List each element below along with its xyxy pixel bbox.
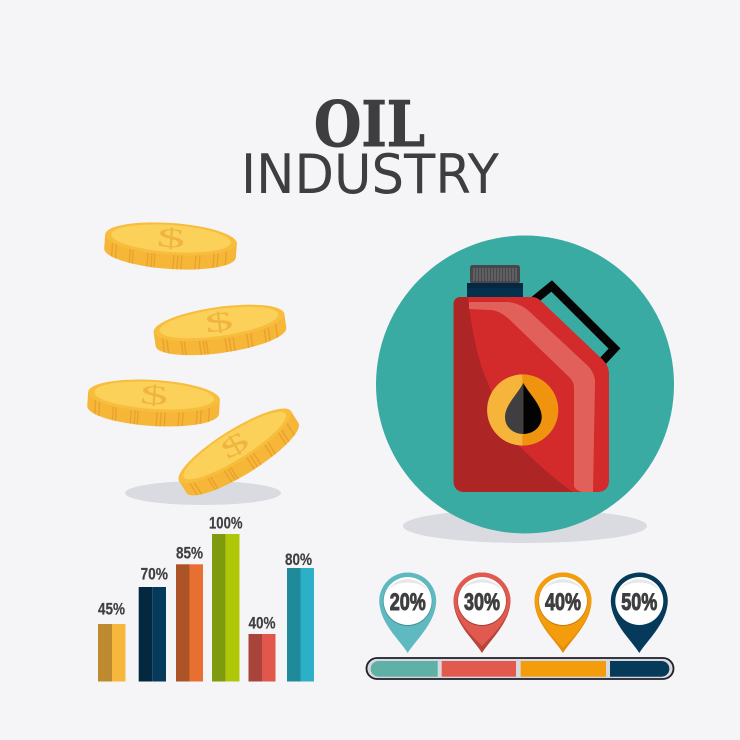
- icon: oil drop: [505, 383, 542, 434]
- pin 50%: [611, 572, 668, 653]
- coin 3: [87, 380, 220, 426]
- segment orange: [521, 661, 606, 677]
- pin 50%: 50%: [621, 589, 657, 616]
- bar 70%: 70%: [140, 566, 168, 584]
- bar 100%: 100%: [209, 514, 243, 532]
- bar 70%: [139, 566, 168, 682]
- title: [241, 87, 500, 206]
- infographic canvas: [87, 99, 674, 682]
- coin 1: [104, 222, 237, 270]
- jug cap: [470, 265, 520, 284]
- coin 4: $: [214, 425, 254, 465]
- pin 40%: [534, 572, 592, 653]
- bar 40%: [248, 614, 276, 682]
- bar 100%: [209, 514, 243, 682]
- coin 2: [154, 304, 286, 356]
- bar 45%: 45%: [98, 600, 125, 618]
- jug highlight band: [469, 302, 595, 492]
- pin 20%: [379, 572, 436, 653]
- coin 1: $: [156, 222, 186, 254]
- teal circle: [376, 236, 674, 534]
- pin 20%: 20%: [390, 589, 426, 616]
- coin shadow: [125, 481, 281, 505]
- jug label: oil drop badge: [487, 374, 558, 446]
- segment red: [442, 661, 516, 677]
- circle shadow: [403, 509, 647, 543]
- bar chart: [98, 514, 314, 682]
- oil jug: [454, 265, 614, 492]
- bar 80%: 80%: [285, 551, 312, 569]
- bar 40%: 40%: [248, 614, 276, 632]
- bar 80%: [285, 551, 314, 682]
- segment navy: [610, 661, 669, 677]
- bar 85%: [176, 544, 203, 682]
- pin 40%: 40%: [545, 589, 581, 616]
- title line: OIL: OIL: [314, 87, 425, 161]
- coin 4: [178, 408, 299, 496]
- jug neck: [467, 283, 523, 298]
- segment teal: [371, 661, 438, 677]
- jug body shadow: [454, 297, 573, 492]
- pin 30%: [454, 572, 510, 653]
- coin 3: $: [139, 379, 169, 411]
- jug handle: [532, 286, 614, 364]
- jug body: [454, 297, 609, 492]
- bar 85%: 85%: [176, 544, 203, 562]
- bar 45%: [98, 600, 126, 682]
- segmented progress bar: [366, 658, 674, 679]
- coin 2: $: [203, 305, 235, 339]
- pin 30%: 30%: [464, 589, 500, 616]
- title line: INDUSTRY: INDUSTRY: [241, 143, 500, 206]
